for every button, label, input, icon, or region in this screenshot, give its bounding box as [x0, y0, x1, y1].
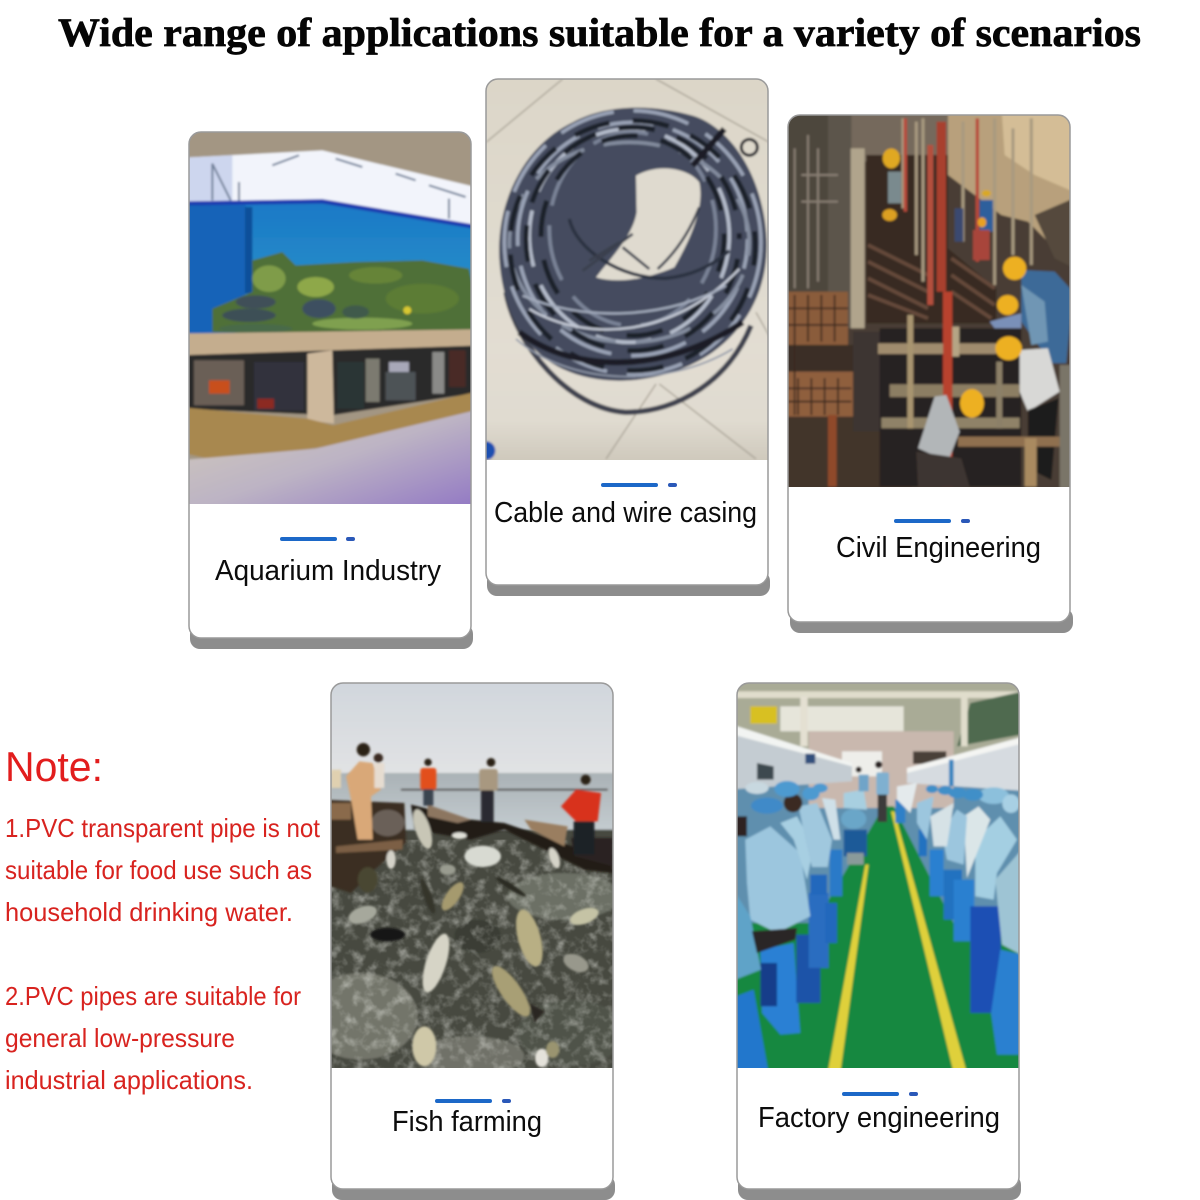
workers right	[895, 783, 1030, 1055]
panel: factory engineering	[727, 673, 1034, 1200]
note 1: household drinking water.	[5, 897, 293, 927]
label bar	[842, 1092, 918, 1096]
note 2: industrial applications.	[5, 1065, 253, 1095]
photo: coiled cable	[486, 80, 768, 460]
label bar	[894, 519, 970, 523]
note 1: suitable for food use such as	[5, 855, 312, 885]
label bar	[280, 537, 355, 541]
panel: cable and wire casing	[476, 69, 783, 596]
photo: factory floor	[738, 684, 1018, 1068]
green floor	[828, 805, 954, 925]
photo: aquarium	[190, 132, 470, 504]
note 2: general low-pressure	[5, 1023, 235, 1053]
panel: aquarium industry	[179, 122, 486, 649]
note 2: 2.PVC pipes are suitable for	[5, 981, 301, 1011]
photo: fish harvest	[332, 684, 612, 1068]
panel: civil engineering	[778, 105, 1085, 633]
note 1	[5, 813, 321, 927]
workers	[882, 148, 1073, 487]
label: Factory engineering	[758, 1102, 1000, 1134]
title: Wide range of applications suitable for a variety of scenarios	[58, 10, 1141, 55]
label bar	[601, 483, 677, 487]
note 2	[5, 981, 301, 1095]
note text block	[5, 743, 321, 1095]
fishermen	[331, 743, 601, 855]
photo: construction site	[788, 116, 1070, 487]
label: Aquarium Industry	[215, 555, 441, 587]
label: Civil Engineering	[836, 532, 1041, 564]
label: Fish farming	[392, 1106, 542, 1138]
label: Cable and wire casing	[494, 497, 757, 529]
note heading: Note:	[5, 743, 103, 790]
panel: fish farming	[304, 673, 628, 1200]
workers left	[727, 761, 889, 1073]
fish	[346, 807, 601, 1067]
note 1: 1.PVC transparent pipe is not	[5, 813, 321, 843]
label bar	[435, 1099, 511, 1103]
